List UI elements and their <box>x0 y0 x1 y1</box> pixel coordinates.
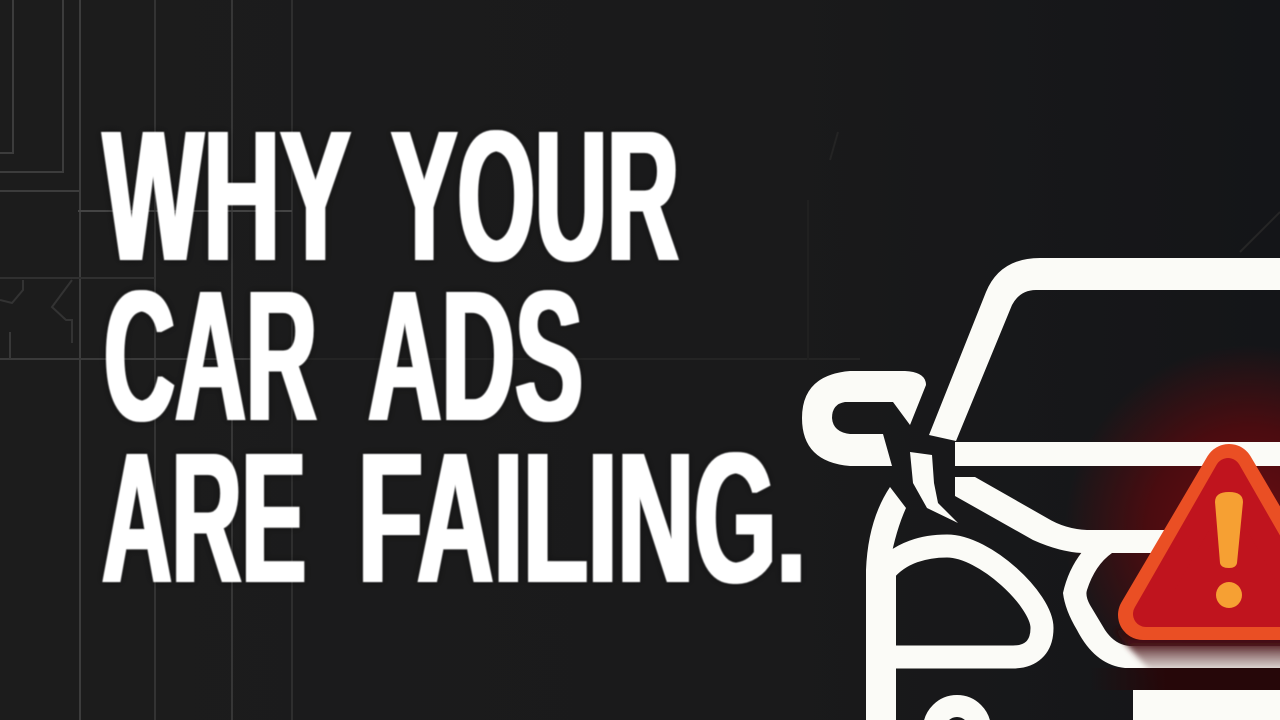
title line 2: CAR <box>104 253 317 460</box>
exclamation dot <box>1216 582 1242 608</box>
title line 3: FAILING. <box>358 415 806 622</box>
icon: warning triangle <box>1143 469 1280 615</box>
exclamation bar <box>1215 492 1243 568</box>
triangle border <box>1143 469 1280 615</box>
side mirror <box>802 371 926 466</box>
title line 1: YOUR <box>391 93 679 300</box>
title line 3: ARE <box>102 415 306 622</box>
title line 2: ADS <box>368 253 583 460</box>
grille outline <box>1063 552 1280 668</box>
crack fragment <box>910 452 958 523</box>
red glow <box>1040 340 1280 720</box>
headlight <box>881 546 1042 657</box>
hood line <box>955 442 1280 466</box>
license plate <box>1133 690 1280 720</box>
triangle fill <box>1146 471 1280 614</box>
title line 1: WHY <box>103 93 351 300</box>
shadow under bumper <box>1090 668 1280 690</box>
icon: cracked car outline <box>802 258 1280 720</box>
title <box>102 93 806 622</box>
car roof and windshield <box>929 258 1280 441</box>
lower hood line <box>955 477 1180 553</box>
title line 3 <box>102 415 806 622</box>
left fender <box>866 487 906 720</box>
warning triangle shadow <box>1115 630 1280 670</box>
fog lamp <box>934 706 980 720</box>
